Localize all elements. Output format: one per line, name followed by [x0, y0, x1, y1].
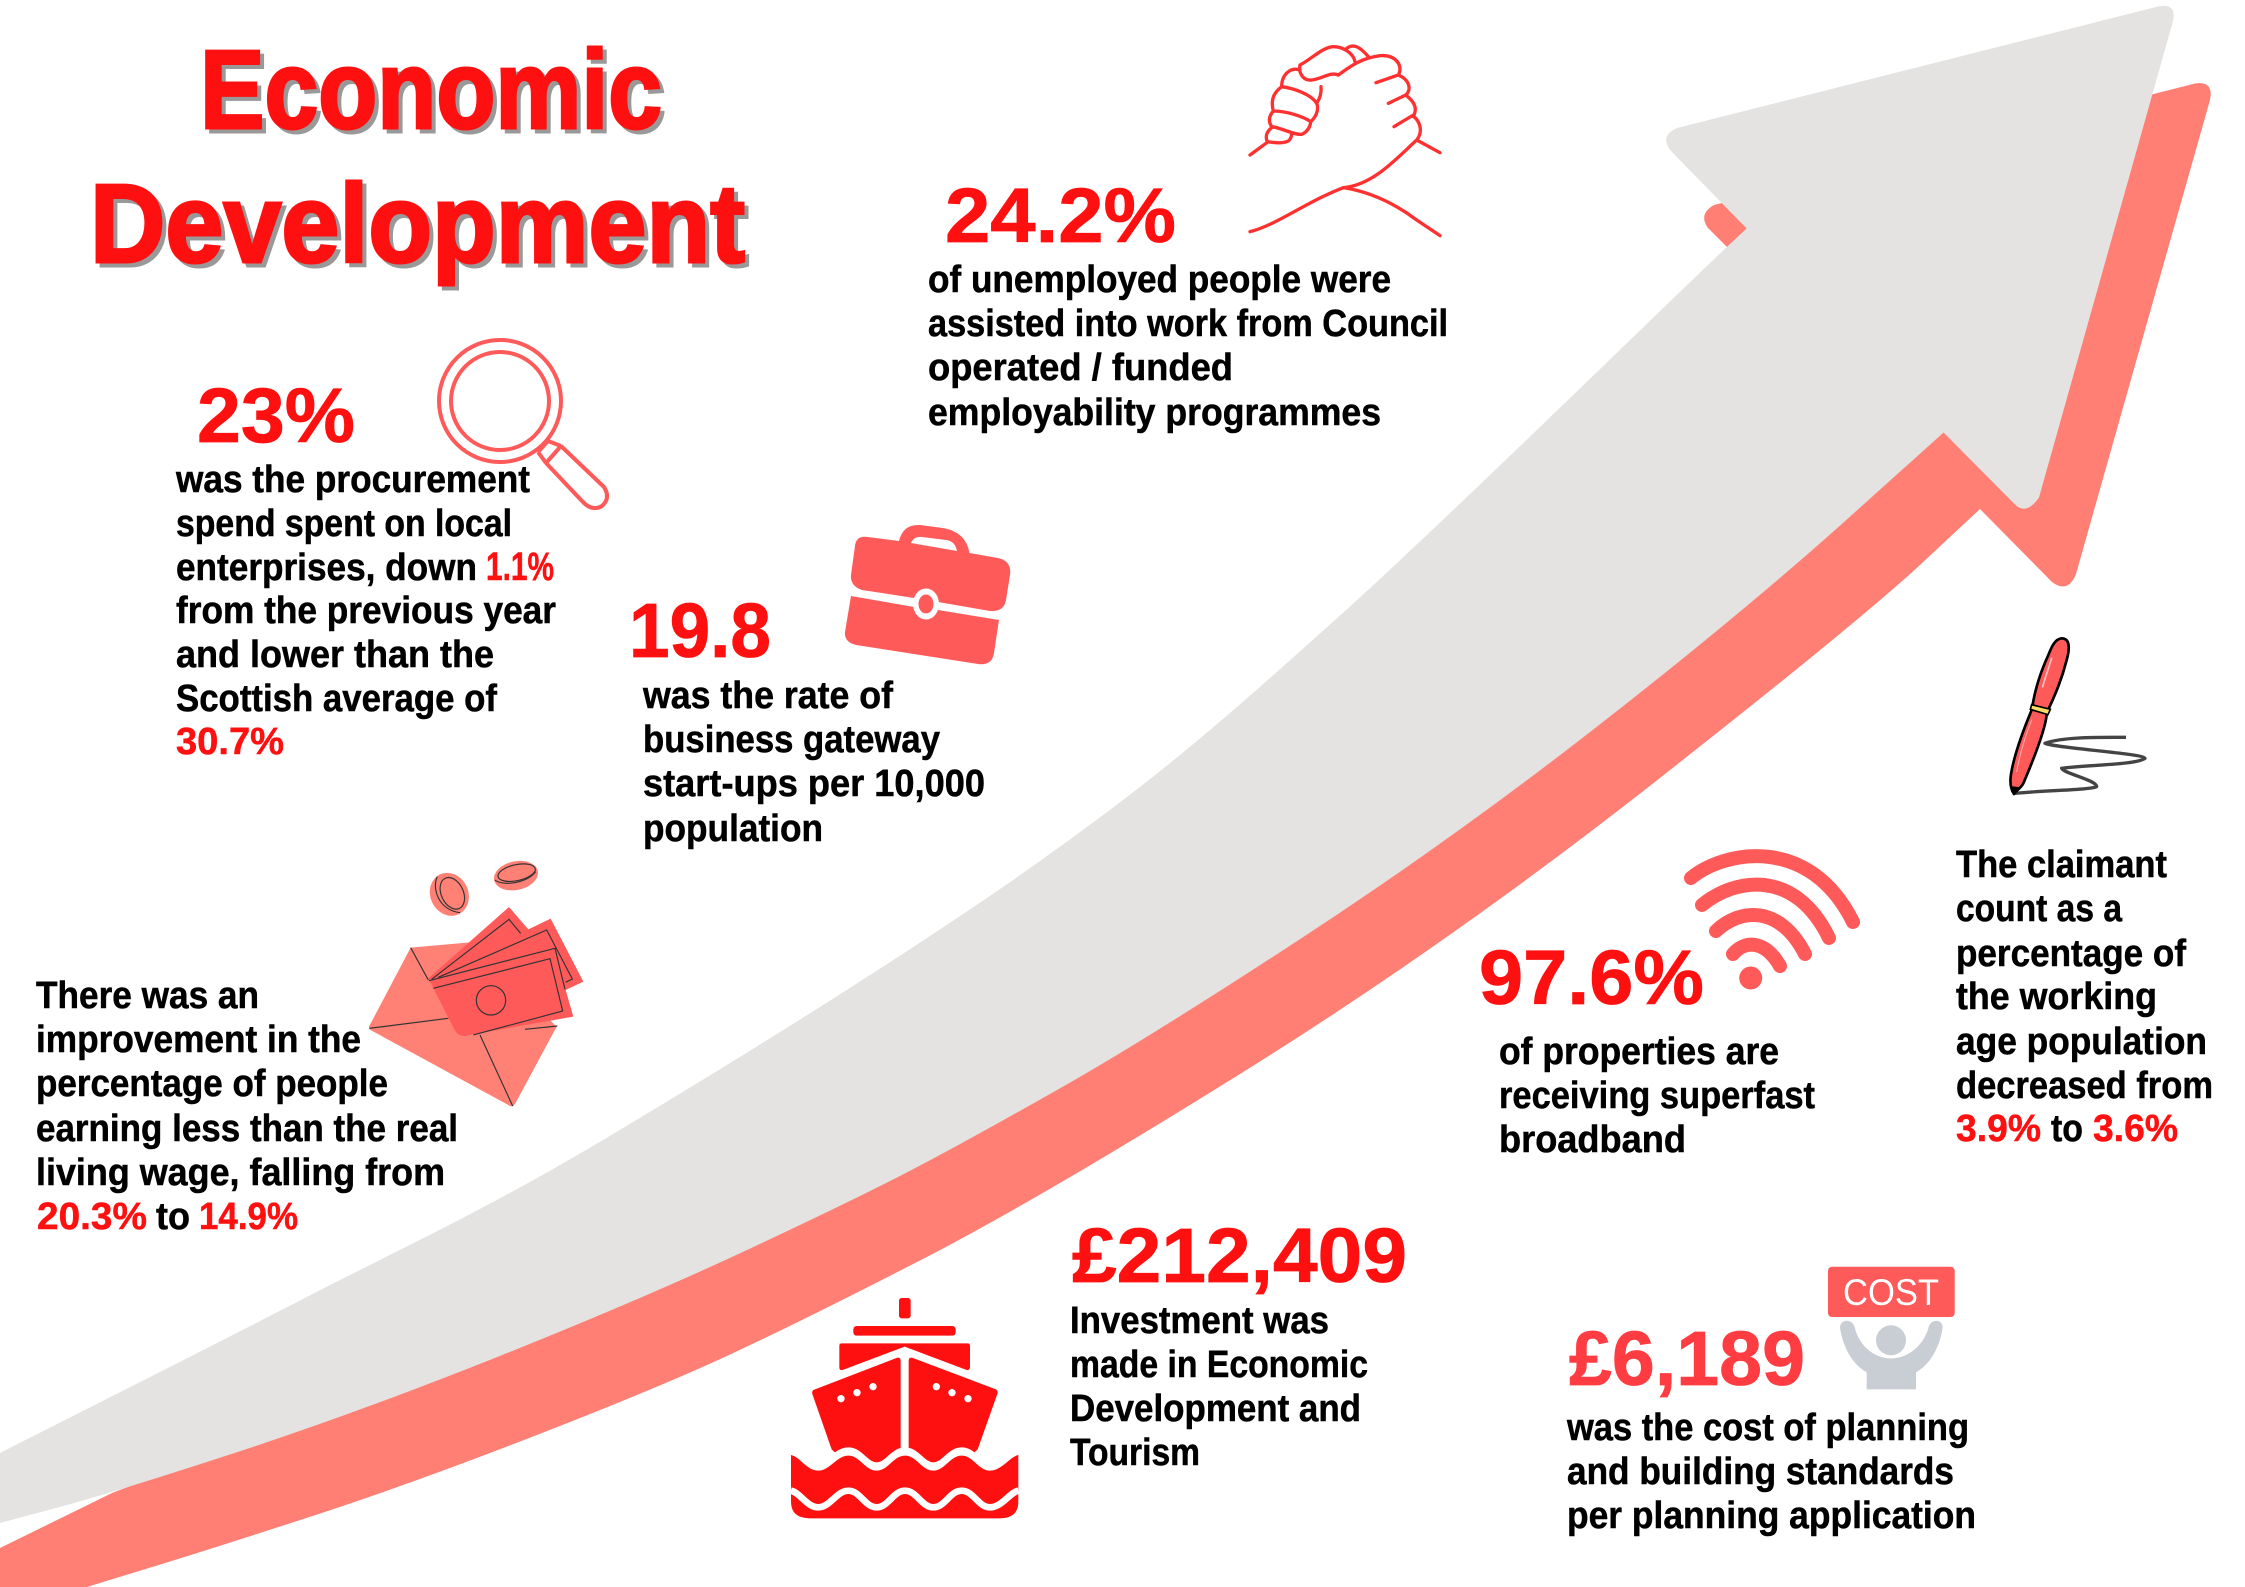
stat: 23%: 23% [197, 373, 355, 459]
text: employability description: assisted into work from Council [928, 303, 1448, 345]
text: investment description: Investment was [1070, 1300, 1329, 1342]
text: business gateway description: business gateway [643, 719, 940, 761]
text: real living wage description: improvement in the [36, 1019, 361, 1061]
text: claimant description [1956, 844, 2213, 1150]
text: real living wage description: percentage of people [36, 1063, 388, 1105]
text: procurement description: 1.1% [486, 545, 554, 589]
text: procurement description: 30.7% [176, 721, 284, 763]
panel: real living wage [36, 857, 583, 1238]
text: employability description [928, 259, 1448, 434]
text: broadband description: broadband [1499, 1119, 1686, 1161]
icon: clasped hands [1250, 46, 1440, 236]
text: real living wage description: living wage, falling from [36, 1152, 445, 1194]
panel: superfast broadband [1479, 856, 1853, 1161]
text: employability description: operated / funded [928, 347, 1233, 389]
panel: business gateway [629, 525, 1010, 850]
title [90, 28, 749, 290]
text: broadband description: receiving superfast [1499, 1075, 1815, 1117]
text: claimant description: count as a [1956, 888, 2123, 930]
title: Economic [204, 32, 666, 156]
text: employability description: of unemployed people were [928, 259, 1391, 301]
panel: investment [791, 1213, 1407, 1518]
icon: ship on waves [791, 1298, 1018, 1518]
text: procurement description: enterprises, down [176, 547, 477, 589]
text: broadband description: of properties are [1499, 1031, 1779, 1073]
title: Development [94, 166, 749, 290]
text: planning cost description: and building standards [1567, 1451, 1954, 1493]
text: business gateway description: population [643, 808, 823, 850]
text: real living wage description: to [156, 1196, 190, 1238]
icon: person holding cost sign [1828, 1267, 1955, 1389]
text: claimant description: age population [1956, 1021, 2207, 1063]
title: Development [90, 162, 745, 286]
text: real living wage description: 20.3% [37, 1196, 147, 1238]
text: claimant description: the working [1956, 976, 2157, 1018]
text: claimant description: The claimant [1956, 844, 2167, 886]
stat: £212,409: £212,409 [1072, 1213, 1407, 1299]
icon: envelope with money and coins [369, 857, 583, 1106]
panel: claimant count [1956, 638, 2213, 1150]
icon: person holding cost sign: COST [1843, 1272, 1939, 1313]
stat: £6,189: £6,189 [1569, 1316, 1805, 1402]
text: investment description [1070, 1300, 1368, 1474]
panel: procurement spend [175, 340, 607, 763]
icon: wifi signal [1691, 856, 1853, 990]
text: real living wage description: earning less than the real [36, 1108, 458, 1150]
text: real living wage description [36, 975, 458, 1238]
text: procurement description: and lower than the [176, 634, 494, 676]
title: Economic [200, 28, 662, 152]
text: broadband description [1499, 1031, 1815, 1161]
text: claimant description: to [2051, 1108, 2083, 1150]
text: claimant description: 3.6% [2093, 1108, 2178, 1150]
panel: planning cost [1566, 1267, 1976, 1537]
icon: magnifying glass [439, 340, 607, 508]
text: planning cost description: was the cost of planning [1566, 1407, 1969, 1449]
stat: 24.2%: 24.2% [945, 173, 1176, 259]
text: planning cost description [1566, 1407, 1976, 1537]
icon: pen and signature [2010, 638, 2145, 795]
text: procurement description: was the procurement [175, 459, 530, 501]
text: planning cost description: per planning application [1567, 1495, 1976, 1537]
text: procurement description: Scottish average of [176, 678, 497, 720]
text: business gateway description: was the rate of [642, 675, 893, 717]
icon: briefcase [845, 525, 1010, 664]
text: business gateway description [642, 675, 985, 850]
text: claimant description: percentage of [1956, 933, 2186, 975]
text: investment description: Tourism [1070, 1432, 1200, 1474]
text: procurement description: from the previous year [176, 590, 556, 632]
text: claimant description: decreased from [1956, 1065, 2213, 1107]
text: real living wage description: 14.9% [199, 1196, 298, 1238]
text: procurement description: spend spent on local [176, 503, 512, 545]
text: real living wage description: There was an [36, 975, 259, 1017]
text: procurement description [175, 459, 556, 763]
text: investment description: Development and [1070, 1388, 1361, 1430]
text: investment description: made in Economic [1070, 1344, 1368, 1386]
stat: 97.6%: 97.6% [1479, 935, 1704, 1021]
stat: 19.8: 19.8 [629, 588, 771, 674]
text: business gateway description: start-ups per 10,000 [643, 763, 985, 805]
text: employability description: employability programmes [928, 392, 1381, 434]
panel: employability programmes [928, 46, 1448, 434]
text: claimant description: 3.9% [1956, 1108, 2041, 1150]
